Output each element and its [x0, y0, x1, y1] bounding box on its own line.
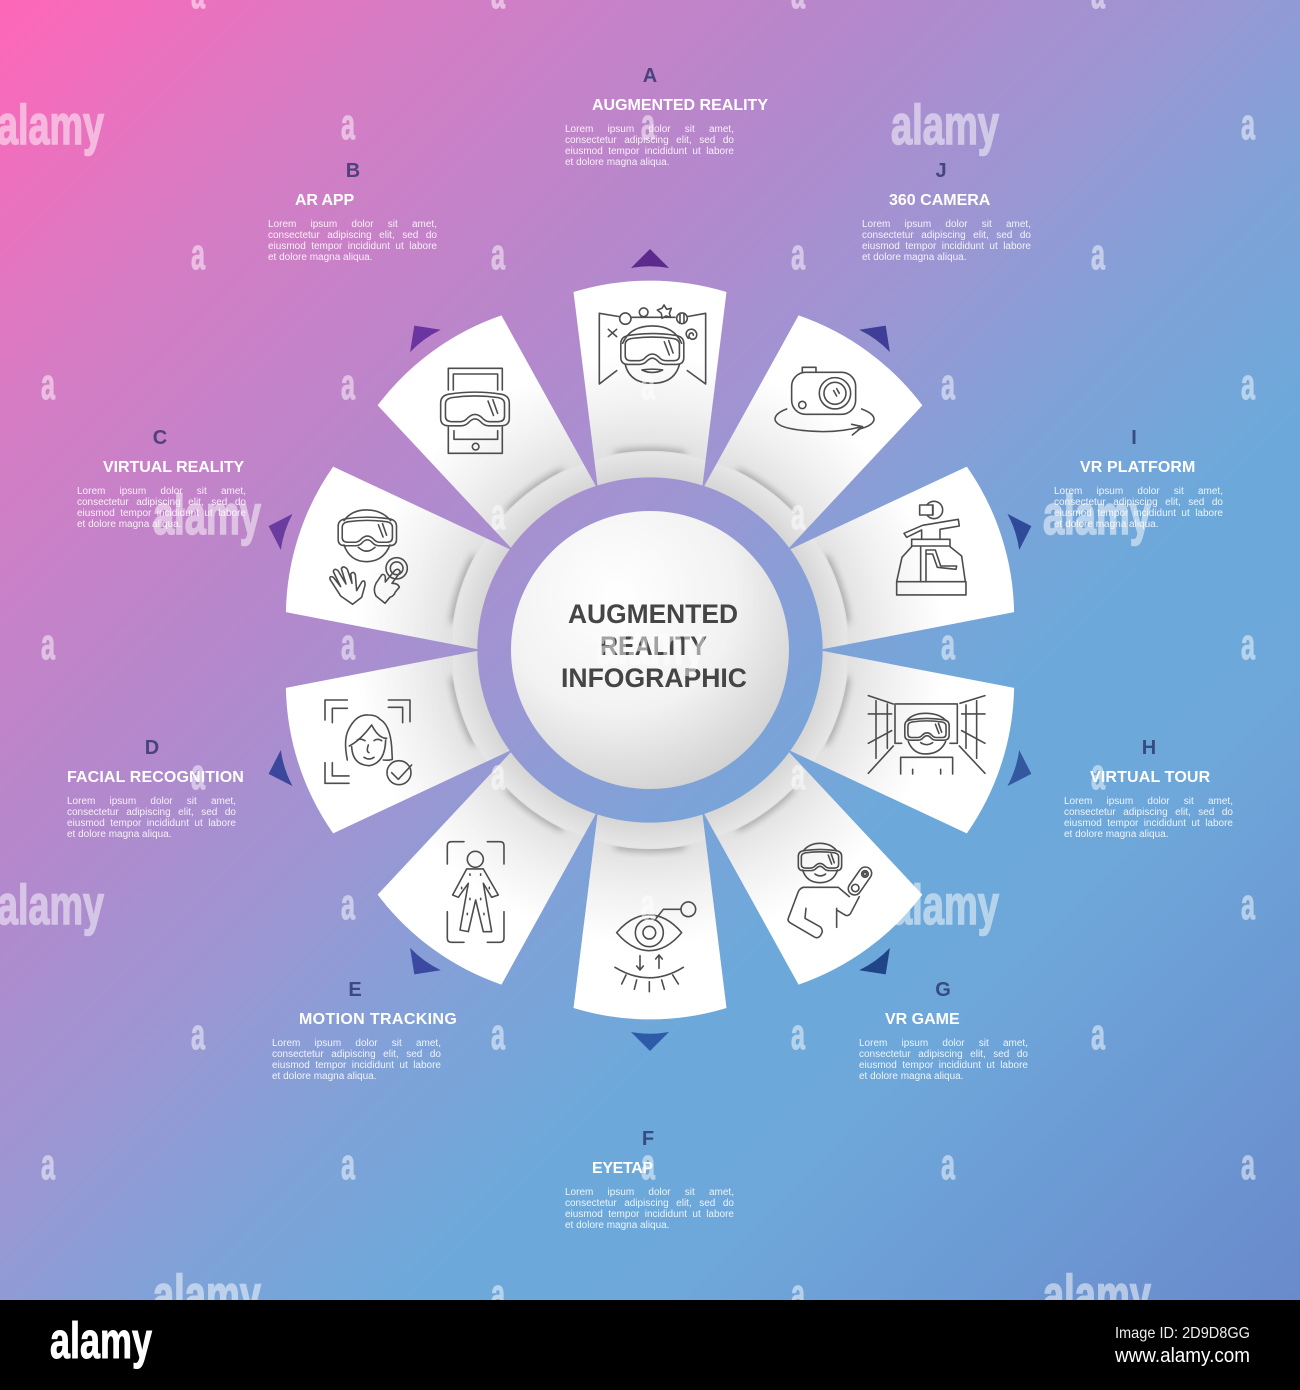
stock watermark pattern: a [1241, 880, 1255, 929]
arrow I [1007, 508, 1037, 550]
petal C [275, 463, 517, 672]
stock watermark pattern: a [641, 1140, 655, 1189]
stock watermark pattern: a [491, 750, 505, 799]
website: www.alamy.com [1114, 1345, 1250, 1367]
description H [1064, 796, 1233, 840]
text block: F [565, 1128, 734, 1231]
icon: VR platform [897, 501, 966, 595]
description A: et dolore magna aliqua. [565, 157, 670, 168]
icon: motion tracking [447, 842, 504, 942]
description I [1054, 486, 1223, 530]
stock watermark pattern: alamy [0, 93, 104, 156]
description C [77, 486, 246, 530]
icon: face recognition [325, 700, 412, 785]
footer logo: alamy [50, 1312, 152, 1369]
description C: Lorem ipsum dolor sit amet, [77, 486, 246, 496]
stock watermark pattern: a [41, 1140, 55, 1189]
description A: consectetur adipiscing elit, sed do [565, 135, 734, 146]
stock watermark pattern: alamy [153, 483, 261, 546]
description G [859, 1038, 1028, 1082]
letter J: J [935, 160, 947, 182]
petal H [783, 628, 1025, 837]
center title [561, 599, 747, 693]
stock watermark pattern: alamy [891, 873, 999, 936]
description E: eiusmod tempor incididunt ut labore [272, 1060, 441, 1071]
title G: VR GAME [885, 1011, 960, 1028]
stock watermark pattern: a [1241, 620, 1255, 669]
letter G: G [935, 979, 951, 1001]
stock watermark pattern: a [341, 360, 355, 409]
center title: INFOGRAPHIC [561, 663, 747, 693]
description J: Lorem ipsum dolor sit amet, [862, 218, 1031, 230]
stock watermark pattern: a [491, 1270, 505, 1319]
arrow F [631, 1032, 669, 1051]
description B: et dolore magna aliqua. [268, 252, 373, 263]
panel: E motion tracking [371, 738, 615, 994]
arrow C [263, 508, 293, 550]
stock watermark pattern: a [791, 750, 805, 799]
description J: et dolore magna aliqua. [862, 252, 967, 263]
description G: eiusmod tempor incididunt ut labore [859, 1060, 1028, 1071]
petal I [783, 463, 1025, 672]
description G: Lorem ipsum dolor sit amet, [859, 1038, 1028, 1048]
arrow J [859, 314, 901, 352]
stock watermark pattern: a [1091, 1010, 1105, 1059]
petal E [371, 738, 615, 994]
description J [862, 218, 1031, 263]
text block: J [862, 160, 1031, 263]
icon: VR game [788, 843, 874, 938]
stock watermark pattern: a [1091, 750, 1105, 799]
description J: eiusmod tempor incididunt ut labore [862, 241, 1031, 252]
arrow A [631, 249, 669, 268]
letter A: A [643, 65, 657, 87]
description E [272, 1038, 441, 1082]
arrow G [859, 948, 901, 986]
description D [67, 796, 236, 840]
description D: Lorem ipsum dolor sit amet, [67, 796, 236, 806]
title C: VIRTUAL REALITY [103, 459, 244, 476]
stock watermark pattern: a [341, 620, 355, 669]
text block: I [1054, 427, 1223, 530]
arrow D [263, 750, 293, 792]
icon: eye tap [615, 902, 696, 992]
panel: J 360 camera [685, 306, 929, 562]
stock watermark pattern: a [641, 880, 655, 929]
description F: eiusmod tempor incididunt ut labore [565, 1209, 734, 1220]
image id: Image ID: 2D9D8GG [1115, 1325, 1250, 1342]
text block: G [859, 979, 1028, 1082]
description B [268, 218, 437, 263]
center circle [511, 511, 789, 789]
petal wheel [268, 249, 1032, 1051]
stock watermark pattern: a [341, 880, 355, 929]
icon: 360 camera [775, 367, 874, 435]
panel: A augmented reality [574, 249, 726, 486]
stock watermark pattern: a [941, 360, 955, 409]
description H: Lorem ipsum dolor sit amet, [1064, 796, 1233, 806]
description A: Lorem ipsum dolor sit amet, [565, 124, 734, 134]
text block: A [565, 65, 768, 168]
stock watermark pattern: a [41, 360, 55, 409]
letter C: C [153, 427, 167, 449]
description I: et dolore magna aliqua. [1054, 519, 1159, 530]
stock watermark pattern: alamy [1043, 1263, 1151, 1326]
petal J [685, 306, 929, 562]
panel: B AR app [371, 306, 615, 562]
text block: D [67, 737, 244, 840]
stock watermark pattern: a [791, 230, 805, 279]
stock watermark pattern: alamy [891, 93, 999, 156]
center title: REALITY [600, 631, 707, 661]
description C: eiusmod tempor incididunt ut labore [77, 508, 246, 519]
text block: C [77, 427, 246, 530]
stock watermark pattern: a [341, 100, 355, 149]
description F [565, 1186, 734, 1231]
title E: MOTION TRACKING [299, 1011, 457, 1028]
stock watermark pattern: a [1241, 1140, 1255, 1189]
title F: EYETAP [592, 1160, 653, 1177]
panel: C virtual reality [263, 463, 517, 672]
letter F: F [642, 1128, 654, 1150]
description I: eiusmod tempor incididunt ut labore [1054, 508, 1223, 519]
description A [565, 124, 734, 168]
letter E: E [348, 979, 362, 1001]
description J: consectetur adipiscing elit, sed do [862, 230, 1031, 241]
arrow H [1007, 750, 1037, 792]
stock watermark pattern: a [491, 490, 505, 539]
title D: FACIAL RECOGNITION [67, 769, 244, 786]
stock watermark pattern: a [941, 1140, 955, 1189]
icon: AR phone app [441, 368, 509, 453]
letter I: I [1131, 427, 1137, 449]
description G: consectetur adipiscing elit, sed do [859, 1049, 1028, 1060]
arrow E [399, 948, 441, 986]
stock watermark pattern: alamy [596, 613, 705, 676]
description B: eiusmod tempor incididunt ut labore [268, 241, 437, 252]
stock watermark pattern: a [491, 230, 505, 279]
stock watermark pattern: a [41, 620, 55, 669]
description D: eiusmod tempor incididunt ut labore [67, 818, 236, 829]
description G: et dolore magna aliqua. [859, 1071, 964, 1082]
icon: VR with hand gestures [330, 510, 407, 604]
arrow B [399, 314, 441, 352]
letter D: D [145, 737, 159, 759]
petal D [275, 628, 517, 837]
description I: Lorem ipsum dolor sit amet, [1054, 486, 1223, 496]
letter B: B [346, 160, 360, 182]
stock watermark pattern: a [341, 1140, 355, 1189]
description F: consectetur adipiscing elit, sed do [565, 1198, 734, 1209]
icon: VR panorama [599, 305, 706, 384]
stock watermark pattern: a [191, 1010, 205, 1059]
stock watermark pattern: alamy [1043, 483, 1151, 546]
description H: eiusmod tempor incididunt ut labore [1064, 818, 1233, 829]
text block: H [1064, 737, 1233, 840]
panel: F eyetap [574, 814, 726, 1051]
title A: AUGMENTED REALITY [592, 97, 768, 114]
description E: consectetur adipiscing elit, sed do [272, 1049, 441, 1060]
panel: H virtual tour [783, 628, 1037, 837]
panel: I VR platform [783, 463, 1037, 672]
letter H: H [1142, 737, 1156, 759]
petal G [685, 738, 929, 994]
stock watermark pattern: a [791, 1010, 805, 1059]
description F: et dolore magna aliqua. [565, 1220, 670, 1231]
stock watermark pattern: a [791, 1270, 805, 1319]
description C: consectetur adipiscing elit, sed do [77, 497, 246, 508]
description I: consectetur adipiscing elit, sed do [1054, 497, 1223, 508]
description H: et dolore magna aliqua. [1064, 829, 1169, 840]
stock watermark pattern: a [641, 360, 655, 409]
center title: AUGMENTED [568, 599, 738, 629]
stock watermark pattern: a [941, 620, 955, 669]
stock watermark pattern: a [191, 750, 205, 799]
panel: D facial recognition [263, 628, 517, 837]
description E: et dolore magna aliqua. [272, 1071, 377, 1082]
text block: B [268, 160, 437, 263]
description C: et dolore magna aliqua. [77, 519, 182, 530]
petal F [574, 814, 726, 1019]
petal A [574, 281, 726, 486]
description B: consectetur adipiscing elit, sed do [268, 230, 437, 241]
stock watermark pattern: alamy [153, 1263, 261, 1326]
description D: consectetur adipiscing elit, sed do [67, 807, 236, 818]
description F: Lorem ipsum dolor sit amet, [565, 1186, 734, 1198]
text block: E [272, 979, 457, 1082]
stock watermark pattern: a [491, 1010, 505, 1059]
description A: eiusmod tempor incididunt ut labore [565, 146, 734, 157]
stock watermark pattern: a [641, 100, 655, 149]
title B: AR APP [295, 192, 354, 209]
title H: VIRTUAL TOUR [1090, 769, 1210, 786]
panel: G VR game [685, 738, 929, 994]
title I: VR PLATFORM [1080, 459, 1195, 476]
stock watermark pattern: a [791, 490, 805, 539]
stock watermark pattern: a [191, 230, 205, 279]
description E: Lorem ipsum dolor sit amet, [272, 1038, 441, 1048]
stock watermark pattern: a [1241, 360, 1255, 409]
petal B [371, 306, 615, 562]
stock watermark pattern: a [1241, 100, 1255, 149]
stock watermark pattern: alamy [0, 873, 104, 936]
title J: 360 CAMERA [889, 192, 990, 209]
description B: Lorem ipsum dolor sit amet, [268, 218, 437, 230]
icon: virtual tour [868, 696, 985, 774]
footer band [0, 1300, 1300, 1390]
stock watermark pattern: a [1091, 230, 1105, 279]
description D: et dolore magna aliqua. [67, 829, 172, 840]
description H: consectetur adipiscing elit, sed do [1064, 807, 1233, 818]
